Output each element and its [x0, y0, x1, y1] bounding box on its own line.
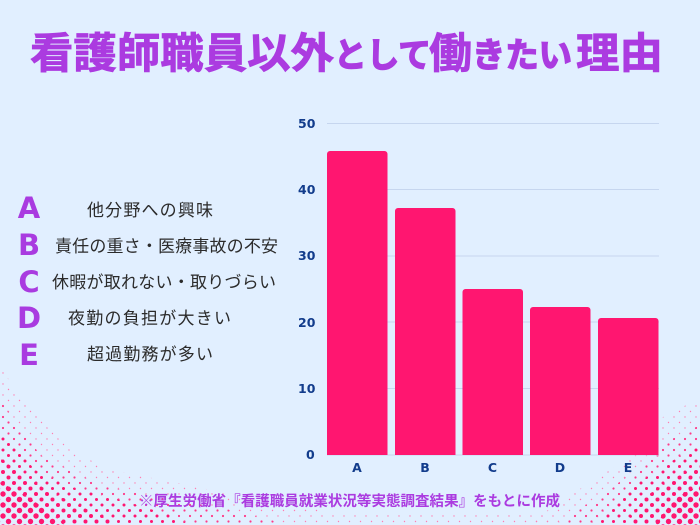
source note: ※厚生労働省『看護職員就業状況等実態調査結果』をもとに作成 [139, 492, 560, 510]
halftone dots: bottom right [520, 398, 700, 525]
legend item B [18, 228, 278, 262]
y axis labels: 40 [298, 182, 316, 197]
legend [17, 191, 278, 372]
y axis labels: 10 [298, 381, 316, 396]
halftone dots: bottom left [0, 366, 700, 525]
legend item D [17, 301, 231, 335]
legend item A [18, 191, 213, 225]
y axis labels [298, 116, 316, 462]
x axis labels: A [352, 460, 362, 475]
legend item E: 超過勤務が多い [87, 345, 213, 364]
title: 働 [429, 30, 472, 77]
legend item E: E [19, 338, 39, 372]
x axis labels: E [624, 460, 632, 475]
legend item C [18, 265, 276, 299]
legend item C: C [18, 265, 40, 299]
legend item A: A [18, 191, 41, 225]
bars [327, 151, 658, 455]
title: として [334, 37, 431, 75]
title: 看護師職員以外 [30, 30, 334, 77]
y axis labels: 0 [306, 447, 315, 462]
legend item D: D [17, 301, 41, 335]
y axis labels: 50 [298, 116, 316, 131]
x axis labels: C [488, 460, 497, 475]
x axis labels: D [555, 460, 565, 475]
legend item D: 夜勤の負担が大きい [68, 309, 231, 328]
legend item C: 休暇が取れない・取りづらい [52, 273, 276, 292]
legend item A: 他分野への興味 [87, 201, 213, 220]
title: 理由 [576, 30, 663, 77]
x axis labels: B [420, 460, 430, 475]
title [30, 30, 663, 77]
y axis labels: 20 [298, 315, 316, 330]
x axis labels [352, 460, 632, 475]
legend item E [19, 338, 213, 372]
legend item B: 責任の重さ・医療事故の不安 [55, 237, 278, 256]
legend item B: B [18, 228, 40, 262]
bar chart [298, 116, 659, 475]
title: きたい [472, 37, 572, 75]
y axis labels: 30 [298, 248, 316, 263]
